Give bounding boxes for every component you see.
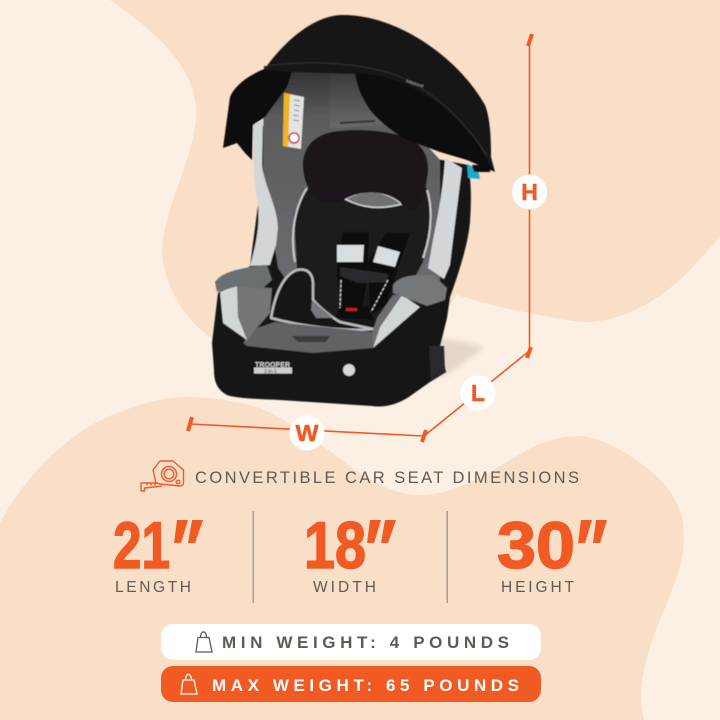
height inch mark <box>578 520 607 543</box>
upper panel slot <box>340 121 375 123</box>
canopy right side panel <box>355 73 495 172</box>
cushion side grey <box>311 300 333 318</box>
left side white panel <box>220 285 247 340</box>
width line <box>190 424 423 436</box>
width badge <box>290 416 324 450</box>
stat: length <box>113 508 203 596</box>
min weight text: MIN WEIGHT: 4 POUNDS <box>222 633 509 652</box>
harness strap right <box>368 233 410 315</box>
heading: CONVERTIBLE CAR SEAT DIMENSIONS <box>195 469 579 487</box>
warning label <box>283 93 304 149</box>
length line <box>424 352 528 436</box>
icon: tape measure <box>141 461 184 491</box>
headrest lower grey crescent <box>345 192 402 207</box>
canopy brand tag: babytrend <box>406 78 424 88</box>
height badge <box>512 174 547 210</box>
length label: LENGTH <box>115 579 191 596</box>
front grey panel <box>243 322 373 353</box>
length inch mark <box>174 520 203 543</box>
chest clip <box>340 267 388 283</box>
length value: 21 <box>113 508 170 582</box>
white piping left <box>293 188 307 262</box>
canopy dome <box>264 15 495 172</box>
height line <box>528 42 530 352</box>
left side grey panel <box>236 286 272 342</box>
height badge: H <box>521 179 538 205</box>
min weight pill <box>161 624 541 660</box>
buckle <box>335 306 374 320</box>
max weight pill <box>161 666 541 702</box>
strap stitching <box>340 280 388 312</box>
canopy clip <box>472 165 490 172</box>
max weight text: MAX WEIGHT: 65 POUNDS <box>212 676 519 695</box>
left white stripe <box>250 120 278 266</box>
trooper logo <box>254 362 292 375</box>
width inch mark <box>367 520 396 543</box>
floor shadow <box>430 337 485 380</box>
red buckle button <box>346 308 357 311</box>
trooper logo: 3-in-1 <box>264 369 277 375</box>
trooper logo: TROOPER <box>255 362 290 369</box>
dimension lines <box>190 42 530 436</box>
stat: width <box>304 508 396 596</box>
headrest <box>303 130 428 210</box>
right side white panel <box>373 295 420 348</box>
left armrest <box>215 265 272 292</box>
background blob: bottom <box>0 397 684 720</box>
base bracket <box>429 346 445 380</box>
car seat <box>212 15 495 406</box>
harness strap left <box>337 232 369 312</box>
right armrest <box>393 275 447 306</box>
seat base shell <box>212 124 471 406</box>
white piping right <box>423 190 431 258</box>
harness pad right <box>373 246 400 267</box>
harness back pad <box>294 186 432 320</box>
width label: WIDTH <box>313 579 376 596</box>
height label: HEIGHT <box>501 579 575 596</box>
icon: max weight <box>181 674 197 694</box>
height value: 30 <box>497 508 575 582</box>
brand icon <box>342 364 356 376</box>
blue clip <box>467 164 480 179</box>
dimension line end ticks <box>188 34 532 442</box>
right side grey panel <box>372 295 402 348</box>
length badge: L <box>471 380 485 406</box>
divider <box>252 511 254 603</box>
canopy band <box>267 63 487 155</box>
background blob: top right <box>110 0 720 345</box>
harness pad left <box>337 245 364 262</box>
seat back grey panel <box>263 66 440 300</box>
front handle <box>292 336 330 342</box>
divider <box>446 511 448 603</box>
right white stripe <box>428 158 462 279</box>
width badge: W <box>296 420 319 446</box>
length badge <box>460 376 496 410</box>
canopy left flap <box>223 68 292 160</box>
icon: min weight <box>196 632 212 652</box>
upper centre grey panel <box>330 72 385 128</box>
stat: height <box>497 508 607 596</box>
seat cushion <box>271 270 373 330</box>
width value: 18 <box>304 508 366 582</box>
